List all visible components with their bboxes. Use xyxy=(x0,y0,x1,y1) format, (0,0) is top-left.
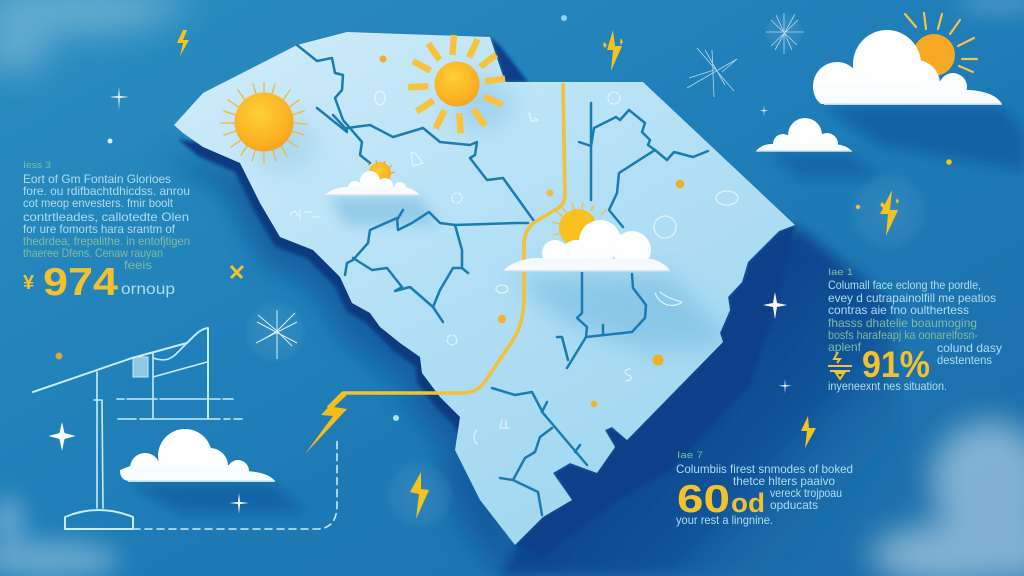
text block: right: aplenf xyxy=(828,340,862,354)
text block: right: evey d cutrapainolfill me peatios xyxy=(828,291,996,305)
text block: bottom: Columbiis firest snmodes of boked xyxy=(676,462,853,476)
yellow x mark xyxy=(231,266,243,278)
text block: left: ¥ xyxy=(23,272,35,294)
yellow map dots xyxy=(380,56,684,407)
text block: left: contrtleades, callotedte Olen xyxy=(23,210,189,224)
text block: right: contras aie fno oulthertess xyxy=(828,303,969,317)
text block: left: feeis xyxy=(124,258,152,272)
text block: right xyxy=(828,267,1002,393)
text block: right: fhasss dhatelie boaumoging xyxy=(828,316,977,330)
text block: bottom xyxy=(676,450,853,527)
icon: large sun xyxy=(221,83,307,163)
map doodles xyxy=(290,91,738,444)
text block: bottom: opducats xyxy=(770,498,818,512)
text block: right: 91% xyxy=(862,344,930,385)
icon: bottom left cloud xyxy=(120,429,305,512)
text block: left: Eort of Gm Fontain Glorioes xyxy=(23,172,171,186)
wind turbine line drawing xyxy=(33,328,337,529)
text block: left: for ure fomorts hara srantm of xyxy=(23,222,176,236)
icon: top right cloud with sun xyxy=(813,13,1024,170)
small pale dots xyxy=(108,15,567,421)
text block: bottom: od xyxy=(731,488,765,518)
text block: left xyxy=(23,160,190,304)
text block: bottom: your rest a lingnine. xyxy=(676,513,773,527)
text block: left: thedrdea, frepalithe. in entofjtigen xyxy=(23,234,190,248)
snowflake bursts xyxy=(243,12,804,364)
yellow route line xyxy=(328,83,565,408)
sparkle icons xyxy=(48,87,792,514)
text block: bottom: 60 xyxy=(677,478,730,521)
map shadow xyxy=(160,37,900,576)
text block: left: 974 xyxy=(43,261,118,304)
text block: right: Columall face eclong the pordle, xyxy=(828,278,981,292)
text block: right: colund dasy xyxy=(937,341,1002,355)
icon: small cloud with sun on map xyxy=(324,160,420,196)
soft shadows on map xyxy=(253,79,735,350)
text block: left: fore. ou rdifbachtdhicdss. anrou xyxy=(23,184,190,198)
text block: bottom: Iae 7 xyxy=(677,450,703,460)
lightning icons xyxy=(56,30,952,530)
rivers xyxy=(297,45,708,515)
icon: central sun behind cloud xyxy=(503,203,670,272)
text block: left: Iess 3 xyxy=(23,160,51,170)
text block: right: bosfs harafeapj ka oonarelfosn- xyxy=(828,328,978,342)
text block: right: Iae 1 xyxy=(828,267,853,277)
text block: left: ornoup xyxy=(121,281,175,298)
text block: right: inyeneexnt nes situation. xyxy=(828,379,947,393)
icon: sun with thick rays xyxy=(408,35,505,133)
text block: right: destentens xyxy=(937,353,992,367)
map of state xyxy=(174,32,795,545)
lightning bolt on route xyxy=(305,394,347,454)
text block: bottom: vereck trojpoau xyxy=(770,486,842,500)
text block: bottom: thetce hlters paaivo xyxy=(733,474,835,488)
icon: middle right cloud xyxy=(756,118,880,178)
text block: left: thaeree Dfens. Cenaw rauyan xyxy=(23,246,163,260)
icon: lightning with bars xyxy=(828,352,852,379)
text block: left: cot meop envesters. fmir boolt xyxy=(23,196,174,210)
